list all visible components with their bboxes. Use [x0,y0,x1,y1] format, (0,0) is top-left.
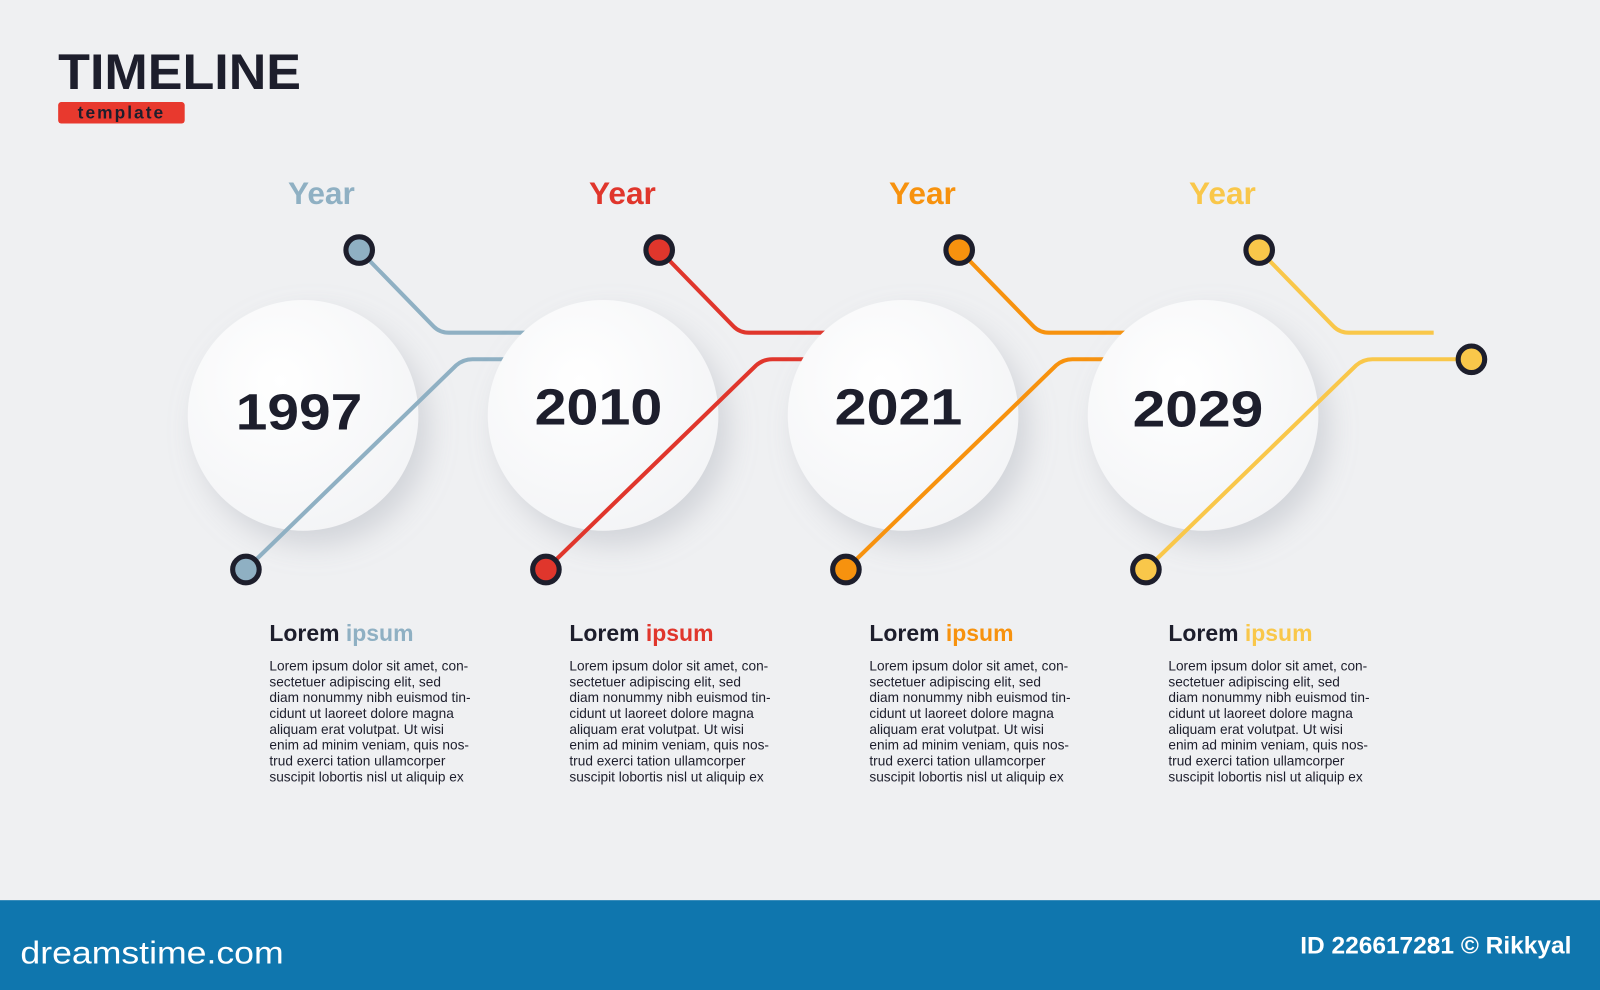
text block 4: aliquam erat volutpat. Ut wisi [1168,722,1343,737]
milestone 2021 [788,175,1131,583]
title [58,44,301,123]
milestone 2010: 2010 [535,379,662,436]
text block 2: diam nonummy nibh euismod tin- [569,690,771,705]
milestone 2029: 2029 [1133,381,1263,438]
text block 2: Lorem ipsum dolor sit amet, con- [569,659,768,674]
milestone 2010: Year [589,175,656,211]
subtitle tag [58,102,185,123]
milestone 2029 [1088,175,1485,583]
text block 3: aliquam erat volutpat. Ut wisi [869,722,1044,737]
text block 1: sectetuer adipiscing elit, sed [269,674,441,689]
milestone 1997: Year [288,175,355,211]
text block 2: Lorem ipsum [569,620,713,646]
text block 4 [1168,620,1370,784]
text block 3 [869,620,1071,784]
milestone 1997: 1997 [236,384,362,441]
text block 1: aliquam erat volutpat. Ut wisi [269,722,444,737]
footer banner: dreamstime.com [20,934,284,970]
text block 1: diam nonummy nibh euismod tin- [269,690,471,705]
milestone 1997 [188,175,531,583]
text block 2 [569,620,771,784]
text block 3: sectetuer adipiscing elit, sed [869,674,1041,689]
text block 2: sectetuer adipiscing elit, sed [569,674,741,689]
title: TIMELINE [58,44,301,100]
text block 4: trud exerci tation ullamcorper [1168,753,1345,768]
footer banner [0,900,1600,990]
text block 2: aliquam erat volutpat. Ut wisi [569,722,744,737]
text block 3: diam nonummy nibh euismod tin- [869,690,1071,705]
text block 1: cidunt ut laoreet dolore magna [269,706,454,721]
text block 3: Lorem ipsum dolor sit amet, con- [869,659,1068,674]
text block 4: sectetuer adipiscing elit, sed [1168,674,1340,689]
text block 1: Lorem ipsum dolor sit amet, con- [269,659,468,674]
text block 4: cidunt ut laoreet dolore magna [1168,706,1353,721]
milestone 2021: Year [889,175,956,211]
text block 1: trud exerci tation ullamcorper [269,753,446,768]
text block 1: enim ad minim veniam, quis nos- [269,738,469,753]
text block 4: enim ad minim veniam, quis nos- [1168,738,1368,753]
text block 1: Lorem ipsum [269,620,413,646]
text block 1: suscipit lobortis nisl ut aliquip ex [269,769,464,784]
footer banner: ID 226617281 © Rikkyal [1300,932,1571,959]
text block 4: Lorem ipsum [1168,620,1312,646]
text block 3: trud exerci tation ullamcorper [869,753,1046,768]
text block 3: cidunt ut laoreet dolore magna [869,706,1054,721]
text block 4: Lorem ipsum dolor sit amet, con- [1168,659,1367,674]
text block 1 [269,620,471,784]
subtitle tag: template [78,102,165,122]
milestone 2010 [488,175,831,583]
milestone 2029: Year [1189,175,1256,211]
text block 4: suscipit lobortis nisl ut aliquip ex [1168,769,1363,784]
text block 3: Lorem ipsum [869,620,1013,646]
text block 2: suscipit lobortis nisl ut aliquip ex [569,769,764,784]
milestone 2021: 2021 [835,379,962,436]
text block 3: suscipit lobortis nisl ut aliquip ex [869,769,1064,784]
text block 3: enim ad minim veniam, quis nos- [869,738,1069,753]
text block 2: enim ad minim veniam, quis nos- [569,738,769,753]
text block 2: trud exerci tation ullamcorper [569,753,746,768]
text block 4: diam nonummy nibh euismod tin- [1168,690,1370,705]
text block 2: cidunt ut laoreet dolore magna [569,706,754,721]
